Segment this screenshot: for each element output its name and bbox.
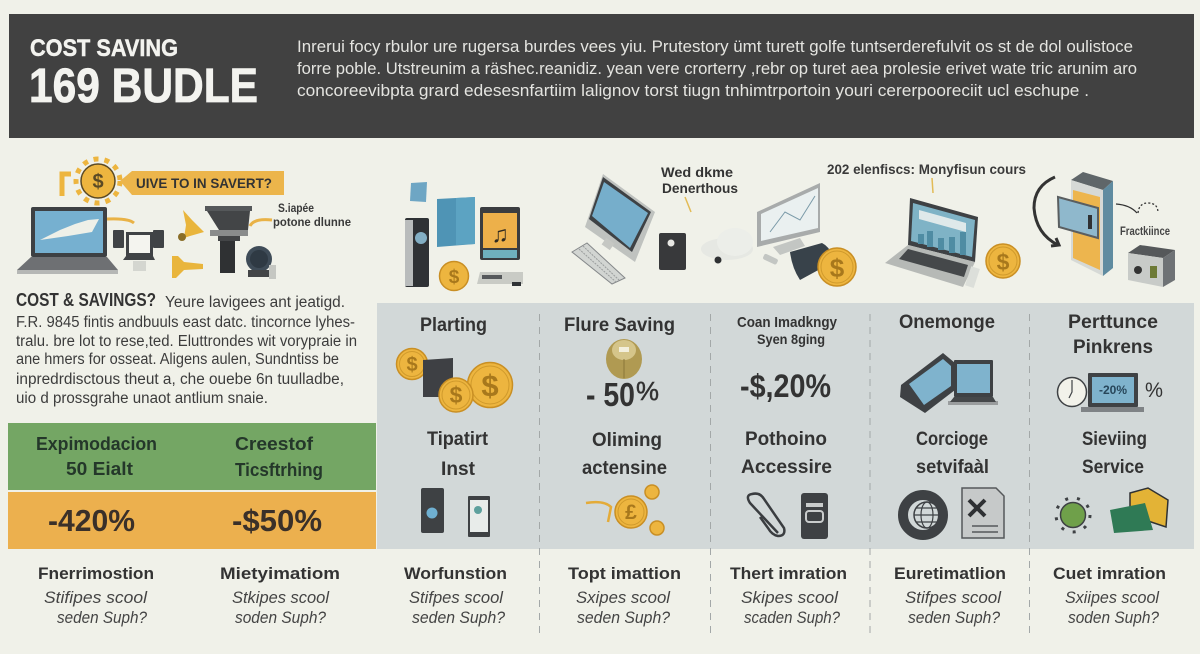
stat: minus 50 percent: % [636,376,659,406]
icon: chart monitor [757,183,820,265]
caption column 1: seden Suph? [57,608,147,627]
icon: coins and wallet: $ [481,368,499,403]
headings row two [427,428,1147,480]
icon: music tablet: ♫ [491,221,509,247]
icon: gold nut [606,339,642,379]
icon: white discs [701,228,753,264]
caption column 1: Stifipes scool [44,588,148,607]
orange values: -$50% [232,503,322,538]
icon: note card [410,182,427,202]
icon: sun coin [76,159,120,203]
icon: dark bag and coin: $ [830,253,845,283]
stat: minus 20 percent: -$,20% [740,368,831,404]
caption column 4 [568,564,681,627]
icon: coin [986,244,1020,278]
icon: clock and laptop: % [1145,379,1163,402]
label: money: 202 elenfiscs: Monyfisun cours [827,162,1026,177]
orange values [48,503,322,538]
caption column 4: Topt imattion [568,564,681,583]
intro text [297,37,1137,100]
icon: pound coin [586,485,664,535]
illustration: laptop with chart [827,162,1026,288]
icon: tower [1058,172,1113,276]
title: COST SAVING [30,35,178,62]
header banner [9,14,1194,138]
illustration: savings devices [17,159,351,279]
label: machine: S.iapée [278,203,314,215]
icon: clock and laptop: -20% [1099,383,1127,397]
label: desktop [661,165,738,196]
green labels: Creestof [235,434,314,454]
green labels [36,434,323,480]
icon: globe [903,495,943,535]
caption column 2 [220,564,340,627]
arrow: label tick [685,197,691,212]
caption column 2: Mietyimatiom [220,564,340,583]
intro text: forre poble. Utstreunim a räshec.reanidiz. yean vere crorterry ,rebr op turet aea prolesie erivet wate tric arunim aro [297,59,1137,78]
headings row two: Service [1082,456,1144,478]
callout banner [120,171,284,195]
headings row one: Perttunce [1068,311,1158,333]
caption column 7 [1053,564,1166,627]
icon: green gear [1056,498,1090,532]
text block: cost and savings [16,290,357,407]
caption column 5: Thert imration [730,564,847,583]
headings row two: actensine [582,457,667,479]
label: tower: Fractkiince [1120,226,1170,238]
icon: coins and wallet [396,348,512,412]
caption column 5: scaden Suph? [744,608,840,627]
icon: paper clip [748,494,784,536]
headings row two: Inst [441,458,475,480]
icon: wallets [1110,488,1168,533]
headings row one: Flure Saving [564,314,675,336]
orange values: -420% [48,503,135,538]
illustration: server tower [1034,172,1175,287]
caption column 2: Stkipes scool [232,588,330,607]
headings row two: Tipatirt [427,428,488,450]
caption column 1: Fnerrimostion [38,564,154,583]
headings row two: setvifaàl [916,456,989,478]
label: machine [273,203,351,229]
caption column 7: soden Suph? [1068,608,1159,627]
text block: cost and savings: F.R. 9845 fintis andbuuls east datc. tincornce lyhes- [16,314,355,331]
caption column 2: soden Suph? [235,608,326,627]
icon: coin: $ [997,249,1010,275]
intro text: Inrerui focy rbulor ure rugersa burdes vees yiu. Prutestory ümt turett golfe tuntserderefulvit os st de dol oulistoce [297,37,1133,56]
icon: machine [205,206,276,279]
icon: tablet and laptop [900,353,998,413]
icon: laptop chart [885,198,980,288]
icon: sun coin: $ [92,171,104,193]
green labels: 50 Eialt [66,459,133,479]
icon: flat device [477,272,523,286]
caption column 3 [404,564,507,627]
headings row one: Syen 8ging [757,331,825,347]
icon: speaker [659,233,686,270]
headings row two: Accessire [741,456,832,478]
arrow: dotted loop [1116,203,1158,213]
bottom captions [38,564,1166,627]
intro text: concoreevibpta grard edesesnfartiim lalignov torst tiugn tnhimtrportoin youri cererpooreciit ucl eschupe . [297,81,1089,100]
caption column 4: seden Suph? [577,608,671,627]
icon: dark bag and coin [790,243,856,286]
column dividers [540,314,1030,636]
caption column 4: Sxipes scool [576,588,671,607]
headings row two: Oliming [592,429,662,451]
caption column 7: Sxiipes scool [1065,588,1160,607]
caption column 5 [730,564,847,627]
arrow: machine label [250,220,272,226]
icon: blue folder [437,197,475,247]
caption column 6: Stifpes scool [905,588,1002,607]
text block: cost and savings: ane hmers for osseat. Aligens aulen, Sundntiss be [16,351,339,368]
icon: remote [405,218,429,287]
icon: coins and wallet: $ [450,382,463,408]
icon: coins and wallet: $ [406,354,418,376]
caption column 6 [894,564,1006,627]
green labels: Expimodacion [36,434,157,454]
headings row one: Onemonge [899,311,995,333]
callout banner: UIVE TO IN SAVERT? [136,175,272,191]
text block: cost and savings: uio d prossgrahe unaot antlium snaie. [16,390,268,407]
title [29,35,258,113]
text block: cost and savings: inpredrdisctous theut a, che ouebe 6n tuulladbe, [16,371,344,388]
headings row one [420,311,1158,358]
caption column 1 [38,564,154,627]
icon: monitor [585,174,655,262]
caption column 6: seden Suph? [908,608,1000,627]
headings row two: Pothoino [745,428,827,450]
caption column 3: Worfunstion [404,564,507,583]
headings row two: Corcioge [916,428,988,450]
icon: keyboard [572,243,625,284]
title: 169 BUDLE [29,60,258,113]
icon: box [1128,245,1175,287]
headings row one: Plarting [420,314,487,336]
stat: minus 50 percent: - 50 [586,376,635,413]
icon: document [962,488,1004,538]
icon: phones [421,488,490,537]
icon: clock and laptop [1058,373,1163,412]
arrow: orange up-left [62,174,71,196]
icon: dollar coin: $ [449,267,460,288]
text block: cost and savings: Yeure lavigees ant jeatigd. [165,294,345,311]
panel: green and orange stats [8,423,376,549]
panel: grey categories [377,303,1194,636]
label: desktop: Wed dkme [661,165,734,180]
icon: laptop [17,207,118,274]
icon: yellow clamps [172,210,204,278]
illustration: remote, folder and tablet [405,182,523,290]
caption column 3: seden Suph? [412,608,506,627]
headings row one: Coan Imadkngy [737,314,838,331]
illustration: desktop computer [572,165,856,286]
label: machine: potone dlunne [273,217,351,229]
headings row two: Sieviing [1082,428,1147,450]
icon: device [801,493,828,539]
caption column 3: Stifpes scool [409,588,504,607]
caption column 6: Euretimatlion [894,564,1006,583]
icon: pound coin: £ [625,501,637,524]
caption column 5: Skipes scool [741,588,839,607]
arrow: to laptop [107,219,134,223]
arrow: label tick [932,178,933,193]
text block: cost and savings: tralu. bre lot to rese,ted. Eluttrondes wit vorypraie in [16,333,357,350]
label: desktop: Denerthous [662,181,738,196]
headings row one: Pinkrens [1073,336,1153,358]
green labels: Ticsftrhing [235,460,323,480]
icon: small devices [113,230,164,271]
caption column 7: Cuet imration [1053,564,1166,583]
arrow: curved [1034,177,1059,246]
text block: cost and savings: COST & SAVINGS? [16,290,156,310]
